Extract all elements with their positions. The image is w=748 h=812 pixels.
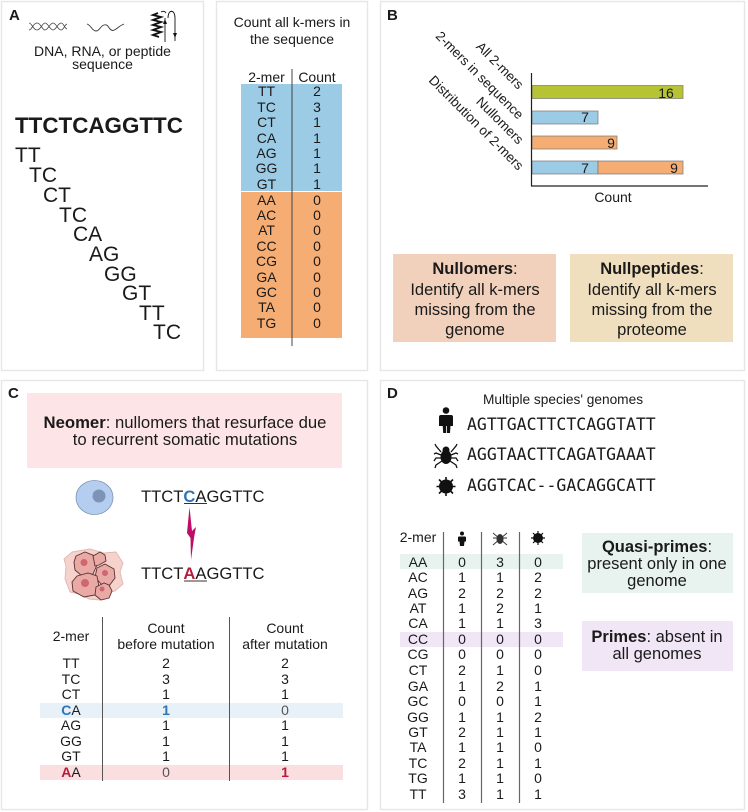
table header: Count [147,620,185,636]
healthy sequence: TTCTCAGGTTC [141,487,265,506]
count table rows: 0 [313,269,321,285]
table divider [291,69,293,346]
sliding 2-mers: GG [104,263,137,286]
table header: 2-mer [53,628,90,644]
panel letter C: C [8,385,19,402]
table rows: 0 [496,693,504,709]
highlight: CA row [40,703,343,718]
table rows: 1 [281,733,289,749]
rotated category labels: All 2-mers [473,39,527,92]
count table rows: 1 [313,114,321,130]
table rows: 1 [458,600,466,616]
panel A: count table [216,2,368,370]
count table title [234,14,350,47]
count table rows: TT [258,83,275,99]
table rows: 1 [458,569,466,585]
table rows: TG [408,770,428,786]
count table rows: CA [257,130,277,146]
table rows: 0 [281,702,289,718]
sliding 2-mers: TC [29,164,57,187]
table rows [407,554,542,802]
table header: 2-mer [400,529,437,545]
table rows: 1 [534,724,542,740]
table rows: GT [61,748,81,764]
panel letter B: B [387,7,398,24]
table rows: 0 [534,554,542,570]
sliding 2-mers: GT [122,282,151,305]
icon: mutation lightning bolt [187,507,196,560]
callout: neomer definition [27,393,342,468]
table rows: 1 [496,662,504,678]
table rows: GG [407,709,429,725]
genome sequences [467,415,656,495]
table rows: CA [408,615,428,631]
genome sequences: AGGTCAC--GACAGGCATT [467,476,656,495]
table rows: AA [61,764,81,780]
callout: nullpeptides [570,254,733,342]
bar: 2-mers in sequence [532,111,598,124]
bar values: 9 [670,160,678,176]
panel letter A: A [9,7,20,24]
bar: all 2-mers [532,86,683,98]
callout: nullomers: missing from the [414,301,536,319]
count table rows: 0 [313,222,321,238]
table rows: 2 [458,755,466,771]
table rows: AG [408,585,428,601]
icon: human [439,407,453,433]
icon: virus [436,477,456,496]
table rows: TC [62,671,80,687]
mutated sequence: TTCTAAGGTTC [141,564,265,583]
table rows: CT [409,662,428,678]
table rows: 2 [458,662,466,678]
count table rows: 2-mer [248,69,285,85]
bar values: 7 [581,109,589,125]
table rows: 1 [534,678,542,694]
callout: quasi-primes: present only in one [587,555,727,573]
table rows: AA [409,554,428,570]
panel A: sequence decomposition [2,2,204,370]
count table rows: Count [298,69,336,85]
table rows: AT [410,600,427,616]
bar values: 7 [581,160,589,176]
table header: after mutation [242,636,328,652]
count table rows [248,69,336,331]
full sequence: TTCTCAGGTTC [15,113,183,138]
table rows: 1 [534,693,542,709]
table rows: 2 [534,585,542,601]
count table rows: GC [256,284,277,300]
count table rows: 0 [313,284,321,300]
count table rows: 0 [313,207,321,223]
table rows: 0 [458,646,466,662]
count table rows: 2 [313,83,321,99]
bar values [581,85,678,176]
callout: nullpeptides: missing from the [591,301,713,319]
table rows: 1 [534,786,542,802]
panel C: neomers [2,380,368,810]
rotated category labels [426,28,527,173]
count table rows: 0 [313,299,321,315]
table rows: 1 [534,755,542,771]
table rows: 1 [458,615,466,631]
table rows: 1 [496,770,504,786]
table rows: 1 [281,717,289,733]
table rows: 2 [281,655,289,671]
callout: neomer definition: Neomer: nullomers that resurface due [44,413,326,432]
table rows: GA [408,678,429,694]
callout: nullpeptides: Nullpeptides: [600,260,704,278]
table rows: 3 [496,554,504,570]
table rows: CC [408,631,428,647]
table rows: 1 [458,709,466,725]
callout: primes [582,621,733,671]
sequence type caption [34,43,171,72]
icon: RNA strand [87,24,124,31]
present k-mers band [241,84,342,191]
table rows: 0 [534,646,542,662]
table rows: 2 [162,655,170,671]
table rows: 1 [281,764,289,780]
icon: healthy cell [76,480,113,514]
table rows: 0 [496,631,504,647]
genome sequences: AGTTGACTTCTCAGGTATT [467,415,656,434]
table rows: 2 [534,709,542,725]
table rows: 1 [496,739,504,755]
callout: primes: Primes: absent in [591,628,723,646]
icon: tumour cells [64,549,123,600]
table rows: 1 [496,786,504,802]
table rows: 0 [534,739,542,755]
table rows: 1 [162,686,170,702]
panel B: bar chart and definitions [380,2,744,370]
icon: DNA helix [29,23,67,30]
table rows: 0 [458,693,466,709]
table rows: 3 [458,786,466,802]
panel letter D: D [387,385,398,402]
table dividers [444,532,520,803]
mutation table [40,617,343,781]
count table rows: 1 [313,130,321,146]
highlight: AA row [40,765,343,780]
count table title: the sequence [250,31,334,47]
rotated category labels: Nullomers [473,94,527,147]
species table [400,529,563,803]
bar values: 16 [658,85,674,101]
table rows: 2 [458,585,466,601]
table rows: 2 [458,724,466,740]
count table rows: GT [257,176,277,192]
table rows: 0 [534,770,542,786]
count table rows: 3 [313,99,321,115]
sliding 2-mers: AG [89,243,119,266]
table rows: 0 [496,646,504,662]
table rows: 3 [534,615,542,631]
table rows: CA [61,702,81,718]
bar values: 9 [607,135,615,151]
callout: nullomers: Identify all k-mers [410,281,540,299]
table rows: 1 [458,739,466,755]
count table rows: CC [256,238,277,254]
table rows: TC [409,755,427,771]
table rows: 2 [496,678,504,694]
table rows: 1 [534,600,542,616]
header icon: human [458,532,466,546]
callout: primes: all genomes [613,645,701,663]
sliding 2-mers: CA [73,223,102,246]
table rows: 0 [162,764,170,780]
sliding 2-mers: TC [59,204,87,227]
count table rows: AG [256,145,277,161]
table rows: TT [62,655,80,671]
count table rows: TA [258,299,276,315]
table rows: 1 [458,770,466,786]
table rows: TT [409,786,427,802]
table rows: 1 [458,678,466,694]
callout: nullpeptides: Identify all k-mers [587,281,717,299]
table rows: 0 [458,554,466,570]
count table rows: 1 [313,160,321,176]
header icon: spider [493,533,507,545]
count table rows: 0 [313,253,321,269]
rotated category labels: Distribution of 2-mers [426,73,527,173]
sequence type caption: DNA, RNA, or peptide [34,43,171,59]
table rows: 1 [162,702,170,718]
bar chart [426,28,708,205]
sliding 2-mers: TC [153,321,181,344]
table rows: 2 [496,600,504,616]
genome sequences: AGGTAACTTCAGATGAAAT [467,445,656,464]
bar: nullomers [532,136,617,149]
callout: quasi-primes: genome [627,572,687,590]
table rows: AC [408,569,428,585]
table dividers [102,617,230,781]
table rows: 2 [534,569,542,585]
table rows: GT [408,724,428,740]
table header [53,620,328,652]
table rows: CT [62,686,81,702]
table rows: 1 [162,733,170,749]
count table rows: TG [257,315,276,331]
callout: nullpeptides: proteome [617,321,687,339]
sliding 2-mers: TT [139,302,165,325]
table header: before mutation [117,636,215,652]
table rows: TA [410,739,427,755]
table rows: AG [61,717,81,733]
table rows: 1 [162,717,170,733]
sliding 2-mers: TT [15,144,41,167]
callout: quasi-primes [582,533,733,593]
highlight: AA row [400,554,563,569]
table rows: 1 [496,755,504,771]
table rows: 0 [534,631,542,647]
callout: quasi-primes: Quasi-primes: [602,538,712,556]
count table rows: GG [256,160,277,176]
absent k-mers band [241,192,342,338]
bar: distribution [532,161,683,174]
count table rows: 0 [313,315,321,331]
icon: peptide structure [153,11,177,42]
count table rows: AC [257,207,276,223]
table rows: 3 [162,671,170,687]
callout: nullomers: Nullomers: [432,260,518,278]
panel D: primes [380,380,744,810]
table rows: 1 [496,569,504,585]
table rows: 1 [496,724,504,740]
sliding 2-mers: CT [43,184,71,207]
count table rows: 1 [313,145,321,161]
table rows: 1 [162,748,170,764]
callout: nullomers [393,254,556,342]
table rows: 0 [534,662,542,678]
count table rows: 1 [313,176,321,192]
table rows: 1 [496,615,504,631]
count table rows: AT [258,222,275,238]
table rows: 3 [281,671,289,687]
table rows: CG [408,646,428,662]
rotated category labels: 2-mers in sequence [433,28,526,122]
table rows: GC [408,693,428,709]
table rows: 2 [496,585,504,601]
table rows: GG [60,733,82,749]
header icon: virus [531,531,545,545]
table header: Count [266,620,304,636]
count table rows: AA [257,192,276,208]
count table rows: 0 [313,238,321,254]
callout: nullomers: genome [445,321,505,339]
icon: spider [434,444,458,468]
sequence type caption: sequence [72,56,133,72]
sliding 2-mers [15,144,181,344]
count table rows: 0 [313,192,321,208]
count table rows: CG [256,253,277,269]
table rows [60,655,289,780]
count table rows: GA [256,269,277,285]
count table title: Count all k-mers in [234,14,350,30]
table rows: 1 [281,748,289,764]
highlight: CC row [400,632,563,647]
callout: neomer definition: to recurrent somatic mutations [73,430,297,449]
chart axes [532,73,708,186]
genomes title: Multiple species' genomes [483,392,643,407]
count table rows: TC [257,99,276,115]
axis title: Count [594,189,632,205]
count table rows: CT [257,114,276,130]
table rows: 1 [281,686,289,702]
table rows: 1 [496,709,504,725]
table rows: 0 [458,631,466,647]
